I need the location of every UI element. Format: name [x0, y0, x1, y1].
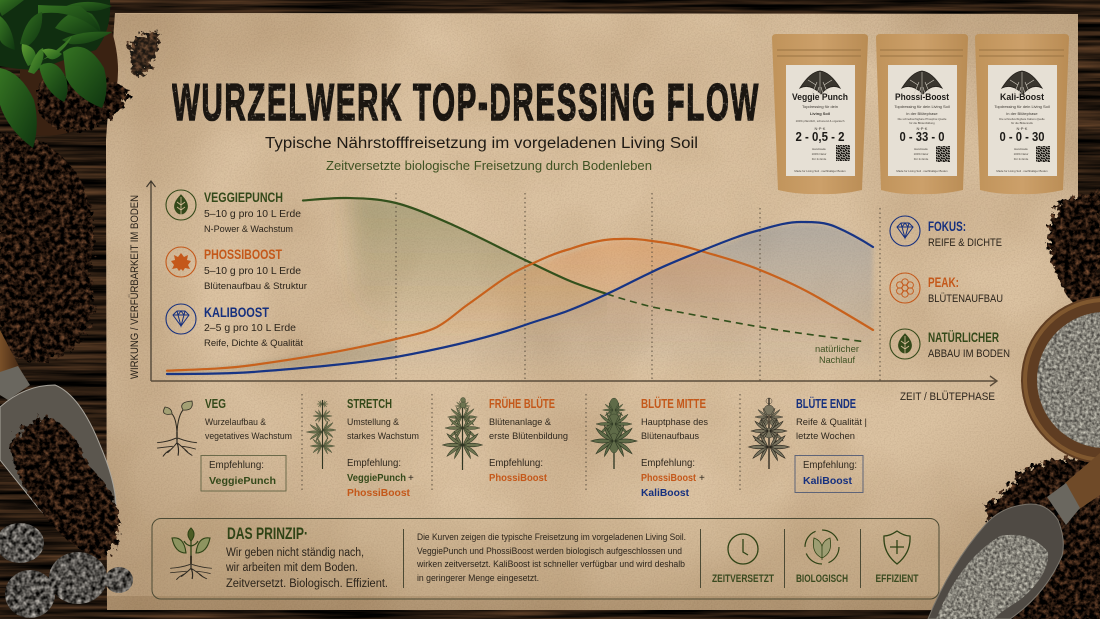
- phase dividers: [396, 193, 880, 381]
- curve: VeggiePunch natural tail: [607, 294, 866, 342]
- icon: orange flower leaf: [166, 247, 196, 277]
- principle statement: wir arbeiten mit dem Boden.: [225, 562, 358, 574]
- y axis label: WIRKUNG / VERFÜRBARKEIT IM BODEN: [129, 195, 141, 379]
- trowel blade: [0, 385, 116, 545]
- soil crumbs top left: [128, 32, 160, 76]
- soil scatter left side: [0, 134, 94, 361]
- legend: VeggiePunch: N-Power & Wachstum: [204, 224, 293, 234]
- icon: leaf: [890, 329, 920, 359]
- x axis label: ZEIT / BLÜTEPHASE: [900, 391, 995, 403]
- callout: Fokus: FOKUS:: [928, 218, 966, 234]
- phase: Frühe Blüte: FRÜHE BLÜTE: [489, 396, 555, 411]
- recommendation box: [201, 456, 286, 491]
- bag: Phossi-Boost: 0 - 33 - 0: [900, 129, 944, 144]
- curve: PhossiBoost: [167, 239, 873, 371]
- phase: Stretch: VeggiePunch: [347, 472, 406, 484]
- bag: Kali-Boost: 0 - 0 - 30: [1000, 129, 1044, 144]
- x axis: [151, 376, 997, 386]
- leaves: [0, 0, 112, 148]
- phase: Blüte Mitte: KaliBoost: [641, 487, 689, 499]
- lava rocks: [0, 523, 133, 618]
- legend: PhossiBoost: PHOSSIBOOST: [204, 246, 282, 262]
- bag: Kali-Boost: Topdressing für dein Living Soil: [994, 104, 1050, 109]
- trowel handle: [1065, 453, 1100, 510]
- bowl with mineral powder: [1021, 296, 1100, 464]
- bag: Veggie Punch: 2 - 0,5 - 2: [796, 129, 844, 144]
- callout: Peak: PEAK:: [928, 274, 959, 290]
- subtitle: Typische Nährstofffreisetzung im vorgeladenen Living Soil: [265, 135, 698, 152]
- pot soil: [38, 74, 130, 131]
- callout: Natürlicher Abbau: ABBAU IM BODEN: [928, 348, 1010, 360]
- bag: Veggie Punch: Veggie Punch: [792, 91, 848, 102]
- bag: Phossi-Boost: Phossi-Boost: [895, 91, 949, 102]
- badge: Zeitversetzt: ZEITVERSETZT: [712, 573, 774, 585]
- callout: Natürlicher Abbau: NATÜRLICHER: [928, 329, 999, 345]
- bag: Phossi-Boost: [876, 34, 968, 198]
- phase: Stretch: starkes Wachstum: [347, 431, 419, 441]
- bag: Kali-Boost: Made for Living Soil · nachhaltiger Boden: [996, 169, 1048, 173]
- trowel with soil left: [0, 330, 119, 558]
- foliage backing: [0, 0, 110, 70]
- tagline: Zeitversetzte biologische Freisetzung durch Bodenleben: [326, 159, 652, 173]
- wooden bowl: [1021, 296, 1100, 464]
- badge: Biologisch: [796, 530, 848, 585]
- phase: Blüte Mitte: [591, 396, 708, 499]
- bag: Phossi-Boost: 100% Natur: [914, 152, 928, 156]
- phase: Blüte Ende: [748, 396, 867, 492]
- natural tail note: [815, 344, 859, 365]
- curve: KaliBoost: [167, 222, 873, 374]
- phase: Blüte Ende: Reife & Qualität |: [796, 417, 867, 427]
- recommendation box: KaliBoost: [803, 475, 852, 487]
- icon: mature plant: [748, 398, 790, 469]
- phase: Frühe Blüte: Empfehlung:: [489, 458, 543, 469]
- phase: Blüte Ende: letzte Wochen: [796, 431, 855, 441]
- mineral powder: [936, 535, 1048, 619]
- heading: DAS PRINZIP·: [227, 525, 308, 543]
- bag: Phossi-Boost: Made for Living Soil · nachhaltiger Boden: [896, 169, 948, 173]
- phase: Veg: [157, 396, 292, 491]
- phase: Frühe Blüte: [442, 396, 568, 484]
- icon: young plant: [306, 400, 336, 469]
- bag: Veggie Punch: 100% Natur: [812, 152, 826, 156]
- phase: Stretch: +: [408, 473, 414, 484]
- badge: Effizient: [876, 531, 919, 585]
- bag: Veggie Punch: [772, 34, 868, 198]
- phase: Blüte Mitte: BLÜTE MITTE: [641, 396, 706, 411]
- phase: Blüte Mitte: Blütenaufbaus: [641, 431, 699, 441]
- area fills: [167, 190, 873, 378]
- phase: Frühe Blüte: Blütenanlage &: [489, 417, 552, 427]
- explanation text: Die Kurven zeigen die typische Freisetzung im vorgeladenen Living Soil.: [417, 532, 686, 542]
- legend: PhossiBoost: [166, 246, 307, 291]
- natural tail note: Nachlauf: [819, 355, 856, 365]
- bag: Veggie Punch: Living Soil: [810, 111, 830, 116]
- bag: Kali-Boost: in der Blütephase: [1006, 111, 1038, 116]
- legend: VeggiePunch: [166, 189, 301, 234]
- curve: VeggiePunch: [303, 198, 607, 294]
- panel: Das Prinzip: [152, 518, 939, 599]
- phase: Blüte Mitte: PhossiBoost: [641, 472, 696, 484]
- icon: diamond: [890, 216, 920, 246]
- explanation text: VeggiePunch und PhossiBoost werden biologisch aufgeschlossen und: [417, 546, 682, 556]
- phase: Blüte Mitte: Hauptphase des: [641, 417, 708, 427]
- mineral gravel: [1037, 312, 1100, 448]
- phase: Stretch: Umstellung &: [347, 417, 400, 427]
- icon: leaf: [166, 190, 196, 220]
- natural tail note: natürlicher: [815, 344, 859, 354]
- badge: Biologisch: BIOLOGISCH: [796, 573, 848, 585]
- recommendation box: [795, 456, 863, 492]
- bag: Veggie Punch: 100% pflanzlich, schonend & organisch: [796, 119, 845, 123]
- bag: Phossi-Boost: Topdressing für dein Living Soil: [894, 104, 950, 109]
- bag: Kali-Boost: für die Blütenreife: [1011, 121, 1033, 125]
- bag: Veggie Punch: N·P·K: [815, 126, 826, 131]
- icon: plant with roots: [171, 528, 211, 580]
- trowel blade: [928, 504, 1063, 619]
- soil right edge: [1048, 190, 1100, 305]
- phase: Veg: Wurzelaufbau &: [205, 417, 267, 427]
- legend: PhossiBoost: Blütenaufbau & Struktur: [204, 281, 307, 291]
- bag: Phossi-Boost: Handmade: [914, 147, 928, 151]
- release curve chart: [129, 181, 997, 403]
- legend: KaliBoost: 2–5 g pro 10 L Erde: [204, 322, 296, 334]
- trowel collar: [0, 366, 30, 400]
- trowel with mineral powder right: [928, 453, 1100, 619]
- legend: KaliBoost: [166, 304, 304, 348]
- icon: full plant: [591, 398, 637, 469]
- explanation text: [416, 532, 686, 583]
- legend: VeggiePunch: VEGGIEPUNCH: [204, 189, 283, 205]
- trowel soil: [10, 417, 119, 558]
- bag: Veggie Punch: Für 2x Erde: [812, 157, 827, 161]
- phase: Blüte Ende: BLÜTE ENDE: [796, 396, 856, 411]
- recommendation box: Empfehlung:: [803, 460, 857, 471]
- principle statement: Wir geben nicht ständig nach,: [226, 547, 364, 559]
- icon: blossom: [890, 273, 920, 303]
- phase separators: [302, 394, 740, 493]
- badge: Effizient: EFFIZIENT: [876, 573, 919, 585]
- phase: Frühe Blüte: erste Blütenbildung: [489, 431, 568, 441]
- bag: Phossi-Boost: in der Blütephase: [906, 111, 938, 116]
- plant pot: [20, 15, 118, 136]
- phase: Veg: vegetatives Wachstum: [205, 431, 292, 441]
- bag: Kali-Boost: Die schnellverfügbare Kalium-Quelle: [999, 117, 1045, 121]
- badge: Zeitversetzt: [712, 534, 774, 585]
- y axis: [146, 181, 156, 381]
- bag: Kali-Boost: Handmade: [1014, 147, 1028, 151]
- callout: Peak: BLÜTENAUFBAU: [928, 293, 1003, 305]
- phase: Stretch: Empfehlung:: [347, 458, 401, 469]
- trowel handle: [0, 330, 22, 390]
- trowel collar: [1047, 483, 1080, 525]
- bag: Kali-Boost: Für 2x Erde: [1014, 157, 1029, 161]
- bag: Phossi-Boost: N·P·K: [917, 126, 928, 131]
- bag: Kali-Boost: N·P·K: [1017, 126, 1028, 131]
- soil scatter lower right: [985, 459, 1100, 619]
- callout: Fokus: [890, 216, 1002, 249]
- bag: Veggie Punch: Made for Living Soil · nachhaltiger Boden: [794, 169, 846, 173]
- principle statement: [225, 547, 388, 590]
- phase: Blüte Mitte: Empfehlung:: [641, 458, 695, 469]
- bag: Phossi-Boost: Die schnellverfügbare Phosphor-Quelle: [898, 117, 947, 121]
- legend: KaliBoost: Reife, Dichte & Qualität: [204, 338, 304, 348]
- phase: Blüte Mitte: +: [699, 473, 705, 484]
- bag: Kali-Boost: 100% Natur: [1014, 152, 1028, 156]
- icon: seedling with roots: [157, 401, 197, 456]
- principle statement: Zeitversetzt. Biologisch. Effizient.: [226, 578, 388, 590]
- bag: Veggie Punch: Handmade: [812, 147, 826, 151]
- explanation text: in geringerer Menge eingesetzt.: [417, 573, 539, 583]
- bag: Phossi-Boost: Für 2x Erde: [914, 157, 929, 161]
- potted plant top left: [0, 0, 130, 148]
- phase: Frühe Blüte: PhossiBoost: [489, 472, 547, 484]
- legend: PhossiBoost: 5–10 g pro 10 L Erde: [204, 265, 301, 277]
- icon: flowering plant: [442, 398, 482, 470]
- callout: Fokus: REIFE & DICHTE: [928, 237, 1002, 249]
- bag: Kali-Boost: [975, 34, 1069, 198]
- phase: Stretch: STRETCH: [347, 396, 392, 411]
- phase: Stretch: [306, 396, 419, 499]
- legend: VeggiePunch: 5–10 g pro 10 L Erde: [204, 208, 301, 220]
- callout: Peak: [890, 273, 1003, 305]
- product bags: [772, 34, 1069, 198]
- bag: Veggie Punch: Topdressing für dein: [802, 104, 838, 109]
- icon: diamond: [166, 304, 196, 334]
- callout: Natürlicher Abbau: [890, 329, 1010, 360]
- bag: Kali-Boost: Kali-Boost: [1000, 91, 1044, 102]
- legend: KaliBoost: KALIBOOST: [204, 304, 269, 320]
- bag: Phossi-Boost: für die Blütenbildung: [909, 121, 935, 125]
- recommendation box: VeggiePunch: [209, 475, 276, 487]
- explanation text: wirken zeitversetzt. KaliBoost ist schneller verfügbar und wird deshalb: [416, 559, 685, 569]
- phase: Veg: VEG: [205, 396, 226, 411]
- recommendation box: Empfehlung:: [209, 460, 264, 471]
- phase: Stretch: PhossiBoost: [347, 487, 410, 499]
